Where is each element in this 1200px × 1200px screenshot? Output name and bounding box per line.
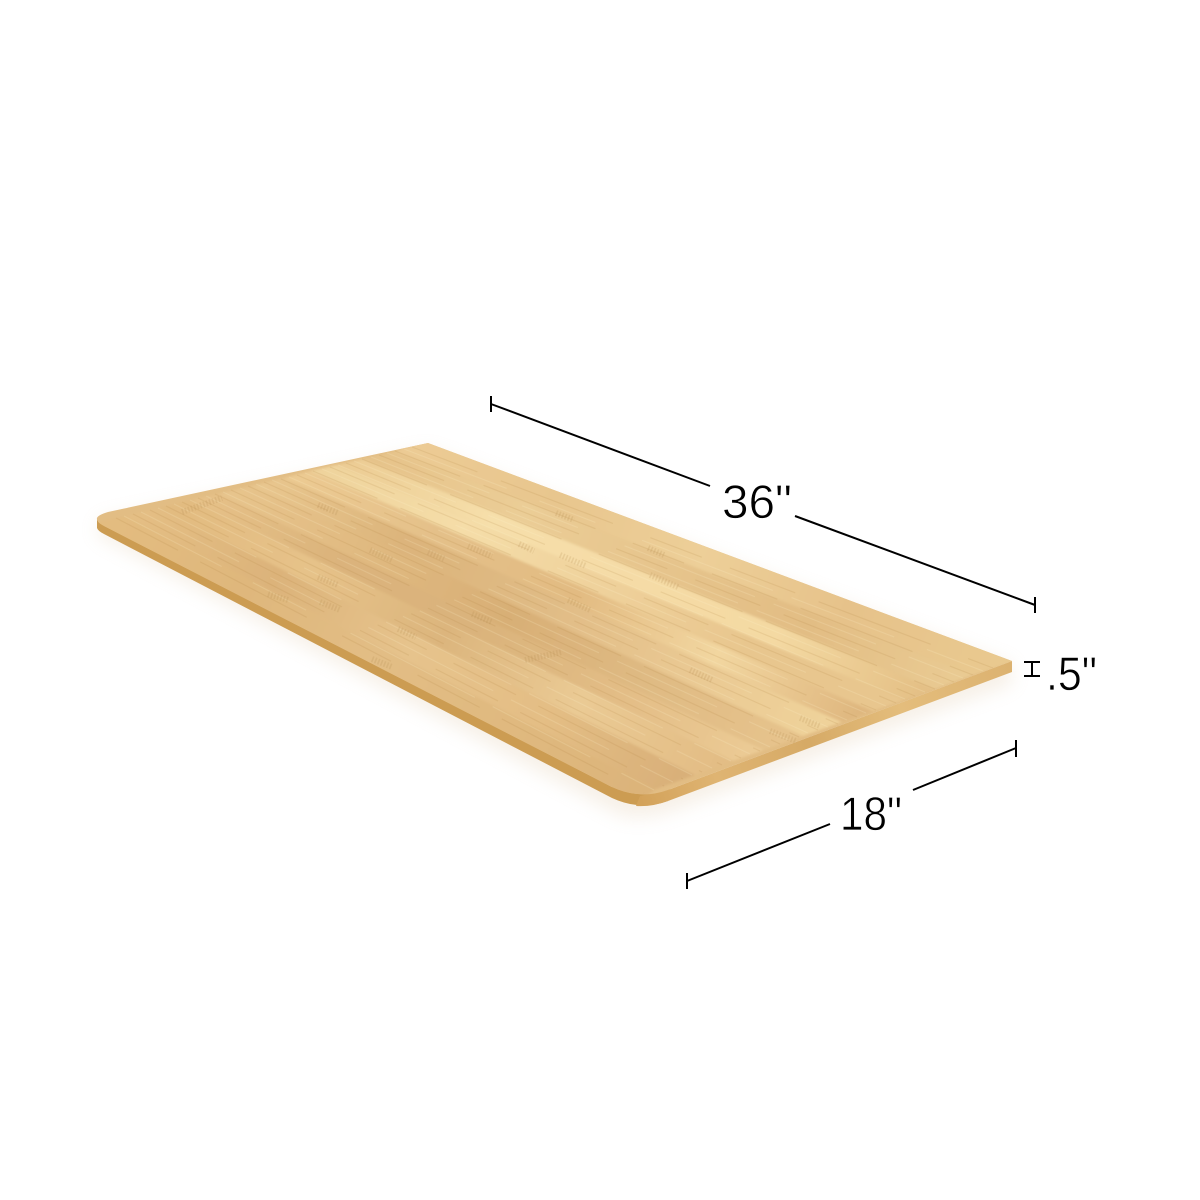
measure bracket: 0.5 inch (1024, 662, 1040, 676)
label: 36 inches: 36" (722, 475, 792, 528)
bamboo node marks (182, 498, 820, 741)
infographic: bamboo desktop with dimensions (96, 396, 1095, 889)
front-left edge of board (97, 518, 670, 805)
label: 0.5 inch: .5" (1046, 647, 1097, 700)
dimension: width 18 inches (687, 740, 1016, 889)
front-right edge of board (636, 661, 1012, 806)
fine grain lines (116, 447, 993, 793)
top surface with bamboo grain (90, 440, 1020, 812)
measure line: 18 inch (687, 740, 1016, 889)
drop shadow under desktop (97, 450, 1012, 817)
dimension: length 36 inches (491, 396, 1035, 613)
measure line: 36 inch (491, 396, 1035, 613)
dimension: thickness 0.5 inch (1024, 647, 1097, 700)
label: 18 inches: 18" (840, 787, 902, 840)
bamboo desktop board (90, 440, 1020, 812)
